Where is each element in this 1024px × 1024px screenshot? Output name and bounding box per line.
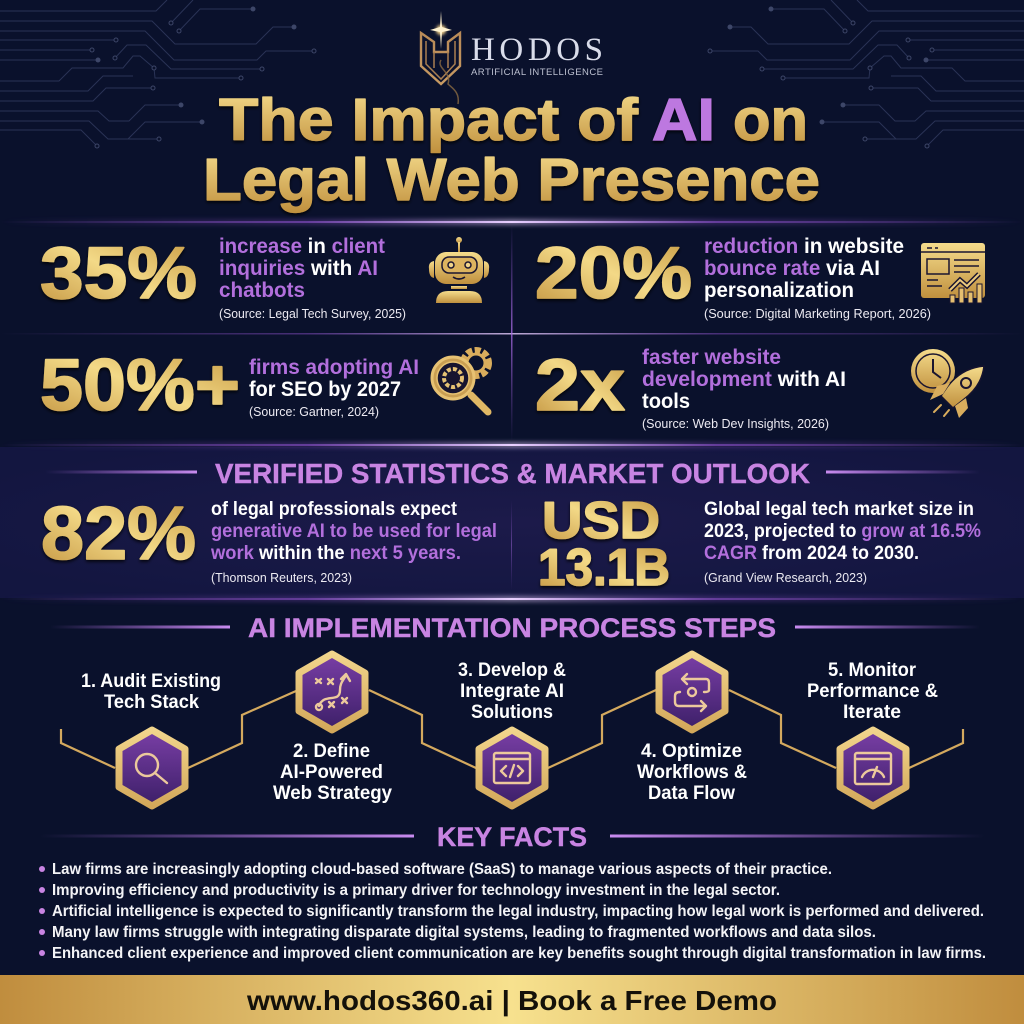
stat: 35%: chatbots [219, 279, 305, 302]
step 2 label: 2. Define [293, 741, 370, 762]
step 4 label: Data Flow [648, 783, 735, 804]
stat: 20%: (Source: Digital Marketing Report, 2026) [704, 307, 931, 321]
stat: 35%: 35% [40, 233, 197, 314]
step 2 [273, 654, 392, 804]
stat: 2x: (Source: Web Dev Insights, 2026) [642, 417, 829, 431]
circuit pattern left [0, 0, 316, 148]
icon: step 4 workflow hexagon [659, 654, 725, 730]
stat: 82%: (Thomson Reuters, 2023) [211, 571, 352, 585]
title: on [733, 87, 808, 153]
step 3 label: Integrate AI [460, 681, 564, 702]
logo [421, 11, 603, 104]
title [203, 87, 820, 213]
key facts list: Law firms are increasingly adopting cloud-based software (SaaS) to manage various aspects of their practice. [52, 861, 832, 878]
stat: 20%: reduction in website [704, 235, 904, 258]
stat: 2x: faster website [642, 346, 781, 369]
stat: 82% [41, 491, 497, 585]
step 4 label [637, 741, 747, 804]
stat: USD 13.1B: USD [542, 492, 660, 550]
heading: process steps [50, 613, 980, 643]
step 1 label: 1. Audit Existing [81, 671, 221, 692]
icon: web analytics [921, 243, 985, 303]
heading: verified statistics [45, 458, 980, 489]
stat: 82%: work within the next 5 years. [210, 543, 461, 564]
logo tagline: ARTIFICIAL INTELLIGENCE [471, 67, 603, 78]
step 2 label [273, 741, 392, 804]
footer call to action [0, 975, 1024, 1024]
step 5 label: Iterate [843, 702, 901, 723]
stat: 50%+ [40, 345, 489, 426]
step 5 label: Performance & [807, 681, 938, 702]
stat: 20%: 20% [535, 233, 692, 314]
step 4 [637, 654, 747, 804]
icon: step 2 strategy hexagon [299, 654, 365, 730]
key facts list: Many law firms struggle with integrating disparate digital systems, leading to fragmented workflows and data silos. [52, 924, 876, 941]
title: Legal Web Presence [203, 147, 820, 213]
stat: 50%+: (Source: Gartner, 2024) [249, 405, 379, 419]
icon: gear magnifier [432, 350, 489, 412]
logo wordmark: HODOS [471, 32, 603, 68]
stat: 2x: tools [642, 390, 690, 413]
stat: USD 13.1B: 2023, projected to grow at 16.5% [704, 521, 981, 542]
key facts list: Improving efficiency and productivity is a primary driver for technology investment in the legal sector. [52, 882, 780, 899]
step 4 label: 4. Optimize [641, 741, 742, 762]
icon: logo emblem [421, 11, 460, 104]
heading: process steps: AI IMPLEMENTATION PROCESS STEPS [248, 613, 776, 643]
stat: 82%: generative AI to be used for legal [211, 521, 497, 542]
stat: 2x: 2x [535, 345, 625, 426]
title: AI [652, 87, 715, 153]
glow divider top [0, 219, 1024, 225]
key facts list [39, 861, 986, 962]
step 1 label: Tech Stack [104, 692, 199, 713]
title: The Impact of [219, 87, 638, 153]
step 3 [458, 660, 566, 806]
icon: step 3 code hexagon [479, 730, 545, 806]
stat: 35% [40, 233, 489, 321]
heading: key facts [40, 822, 985, 852]
key facts list: Artificial intelligence is expected to significantly transform the legal industry, impacting how legal work is performed and delivered. [52, 903, 984, 920]
circuit pattern right [708, 0, 1024, 148]
stat: 2x: development with AI [642, 368, 846, 391]
stat: 50%+: for SEO by 2027 [249, 378, 401, 401]
stat: USD 13.1B: (Grand View Research, 2023) [704, 571, 867, 585]
icon: robot [429, 237, 489, 303]
divider grid [0, 225, 1024, 441]
stat: 50%+: 50%+ [40, 345, 240, 426]
process connector line [61, 690, 963, 768]
stat: 50%+: firms adopting AI [249, 356, 419, 379]
step 1 label [81, 671, 221, 713]
step 4 label: Workflows & [637, 762, 747, 783]
stat: 82%: of legal professionals expect [211, 499, 458, 520]
icon: clock and rocket [911, 349, 984, 418]
stat: 35%: inquiries with AI [219, 257, 378, 280]
step 5 label [807, 660, 938, 723]
icon: step 1 search hexagon [119, 730, 185, 806]
stat: USD 13.1B: 13.1B [538, 539, 670, 597]
step 1 [81, 671, 221, 806]
stat: USD 13.1B: CAGR from 2024 to 2030. [704, 543, 919, 564]
stat: 20%: bounce rate via AI [704, 257, 880, 280]
step 5 [807, 660, 938, 806]
heading: key facts: KEY FACTS [437, 822, 587, 852]
heading: verified statistics: VERIFIED STATISTICS & MARKET OUTLOOK [215, 458, 810, 489]
stat: USD 13.1B: Global legal tech market size in [704, 499, 974, 520]
step 5 label: 5. Monitor [828, 660, 917, 681]
icon: step 5 gauge hexagon [840, 730, 906, 806]
step 3 label: Solutions [471, 702, 553, 723]
step 2 label: AI-Powered [280, 762, 383, 783]
step 3 label: 3. Develop & [458, 660, 566, 681]
stat: 35%: (Source: Legal Tech Survey, 2025) [219, 307, 406, 321]
stat: 82%: 82% [41, 491, 196, 575]
stat: 20% [535, 233, 985, 321]
step 3 label [458, 660, 566, 723]
step 2 label: Web Strategy [273, 783, 392, 804]
stat: 35%: increase in client [219, 235, 385, 258]
stat: 2x [535, 345, 984, 431]
footer call to action: www.hodos360.ai | Book a Free Demo [246, 985, 777, 1016]
panel: verified statistics band [0, 442, 1024, 602]
stat: 20%: personalization [704, 279, 854, 302]
stat: USD 13.1B [538, 492, 981, 597]
